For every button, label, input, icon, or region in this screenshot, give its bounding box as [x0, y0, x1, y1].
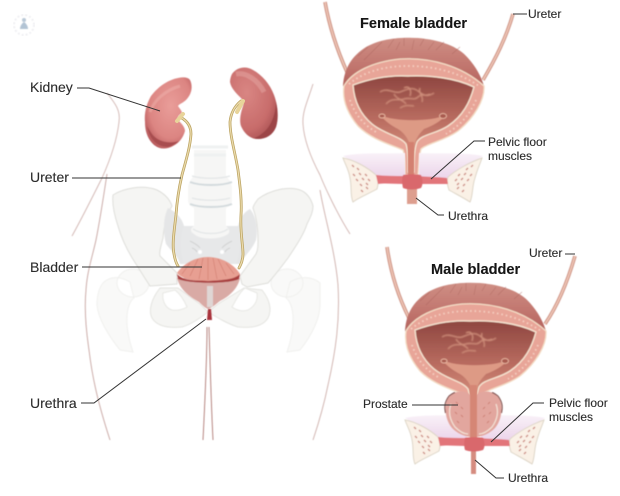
label: urethra	[416, 198, 488, 223]
label: Kidney	[30, 79, 160, 111]
label: Urethra: Urethra	[30, 395, 77, 411]
label: Urethra	[30, 319, 206, 411]
label: Bladder: Bladder	[30, 259, 79, 275]
heading: male bladder: Male bladder	[431, 262, 521, 278]
panel: male bladder	[363, 246, 608, 485]
body outline	[72, 84, 350, 440]
label: urethra	[475, 460, 548, 485]
label: pelvic floor muscles: muscles	[549, 410, 593, 424]
pelvic floor: female	[343, 142, 483, 204]
pelvis and spine	[97, 147, 320, 352]
label: pelvic floor muscles: muscles	[488, 149, 532, 163]
panel: front body view	[72, 67, 350, 440]
label: ureter: Ureter	[528, 7, 561, 21]
label: prostate: Prostate	[363, 397, 408, 411]
labels: front view	[30, 79, 206, 411]
ureters: male	[387, 247, 575, 324]
heading: female bladder: Female bladder	[360, 16, 467, 32]
bladder: female	[343, 38, 484, 175]
label: pelvic floor muscles	[491, 396, 608, 442]
label: Kidney: Kidney	[30, 79, 73, 95]
label: ureter: Ureter	[529, 246, 562, 260]
ureters	[173, 101, 243, 268]
label: ureter	[513, 7, 561, 21]
prostate	[445, 385, 502, 474]
kidney left	[145, 77, 192, 148]
label: pelvic floor muscles: Pelvic floor	[488, 135, 547, 149]
label: urethra: Urethra	[448, 209, 488, 223]
logo	[14, 15, 34, 35]
pelvic floor: male	[405, 415, 545, 464]
ureters: female	[325, 2, 513, 80]
label: prostate	[363, 397, 458, 411]
bladder: male	[405, 283, 546, 420]
label: urethra: Urethra	[508, 471, 548, 485]
label: Ureter: Ureter	[30, 169, 69, 185]
kidney right	[230, 67, 278, 139]
bladder	[177, 257, 240, 320]
label: pelvic floor muscles: Pelvic floor	[549, 396, 608, 410]
panel: female bladder	[325, 2, 561, 223]
label: pelvic floor muscles	[431, 135, 547, 179]
